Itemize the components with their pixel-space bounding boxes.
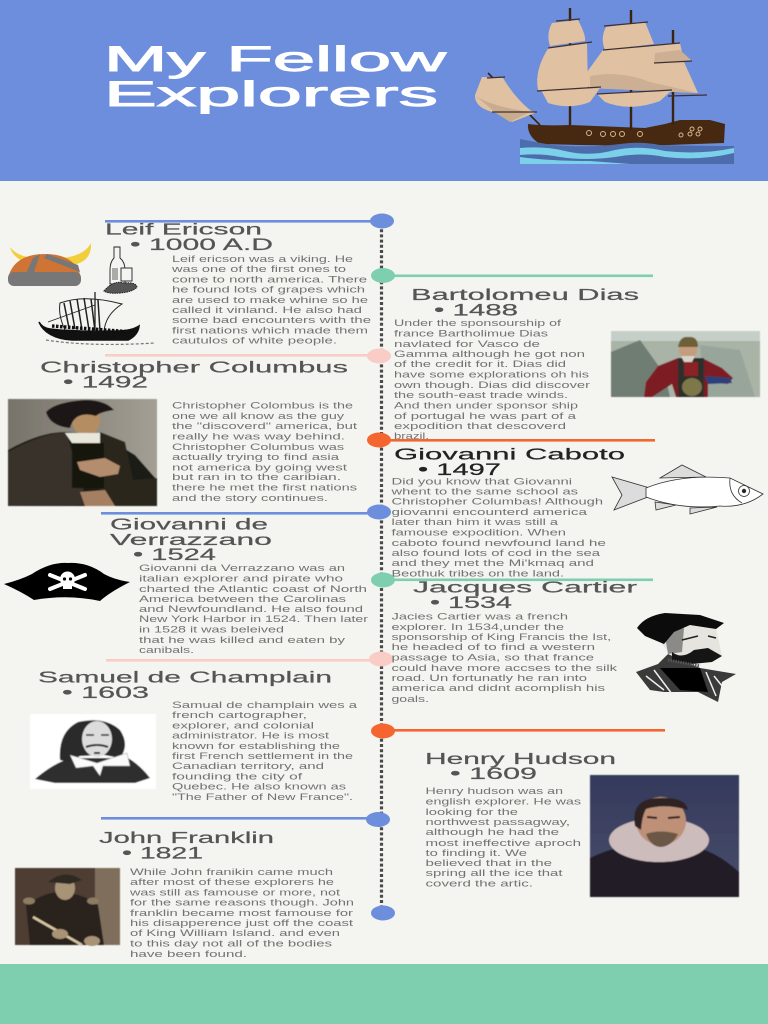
portrait: Jacques Cartier engraving [636,613,736,702]
panel: Leif Ericson [8,222,371,346]
heading: Leif Ericson: Leif Ericson [105,222,262,238]
text: Hudson bio: northwest passagway, [426,817,570,827]
text: Dias bio: france Bartholimue Dias [394,328,549,338]
date: 1603: • 1603 [62,684,149,702]
heading: Giovanni Caboto: Giovanni Caboto [394,446,625,464]
portrait: Bartolomeu Dias [611,331,760,397]
text: Dias bio: have some explorations oh his [394,370,590,380]
text: Champlain bio: administrator. He is most [172,730,330,740]
text: Verrazzano bio: New York Harbor in 1524. Then later [139,614,368,624]
text: Cartier bio: sponsorship of King Francis the Ist, [392,632,611,642]
text: Dias bio: expodition that descoverd [394,421,566,431]
icon: viking longship [39,292,155,344]
text: Champlain bio: founding the city of [172,772,303,782]
date: 1000 A.D: • 1000 A.D [130,236,273,254]
heading: Christopher Columbus: Christopher Columbus [40,359,348,376]
date: 1488: • 1488 [434,302,518,320]
text: Caboto bio: Did you know that Giovanni [392,476,572,486]
text: Dias bio: of the credit for it. Dias did [394,359,566,369]
heading: Giovanni de Verrazzano [110,516,272,549]
text: Champlain bio: first French settlement in the [172,751,353,761]
portrait: John Franklin [15,868,120,946]
header banner [0,0,768,181]
text: Columbus bio: actually trying to find asia [172,452,340,462]
text: Columbus bio: one we all know as the guy [172,411,345,421]
timeline marker: Jacques Cartier [371,572,653,588]
text: Hudson bio: looking for the [426,807,518,817]
text: Dias bio: the south-east trade winds. [394,390,568,400]
text: Caboto bio: and they met the Mi'kmaq and [392,558,594,568]
timeline marker: Samuel de Champlain [106,652,393,666]
text: Verrazzano bio: America between the Carolinas [139,594,347,604]
text: Columbus bio: really he was way behind. [172,432,345,442]
heading: Jacques Cartier: Jacques Cartier [413,580,637,597]
timeline marker: John Franklin [101,812,390,827]
title: Explorers [104,75,438,114]
heading: Giovanni de Verrazzano: Verrazzano [110,532,272,549]
icon: cod fish [612,465,763,514]
timeline marker: Bartolomeu Dias [371,268,653,283]
text: Leif Ericson bio: some bad encounters with the [172,315,371,325]
text: Cartier bio: goals. [392,694,429,704]
text: Champlain bio: Quebec. He also known as [172,782,347,792]
timeline spine [380,224,383,910]
text: Hudson bio: to finding it. We [426,848,527,858]
text: Caboto bio: also found lots of cod in the sea [392,548,601,558]
text: Verrazzano bio: in 1528 it was beleived [139,624,284,634]
text: Verrazzano bio: italian explorer and pirate who [139,574,343,584]
icon: viking helmet [8,243,91,286]
timeline end marker [371,906,395,920]
date: 1524: • 1524 [133,546,216,564]
text: Leif Ericson bio: cautulos of white people. [172,336,337,346]
text: Hudson bio [426,786,582,888]
text: Columbus bio: the "discoverd" america, but [172,421,358,431]
text: Verrazzano bio: and Newfoundland. He also found [139,604,363,614]
text: Verrazzano bio: charted the Atlantic coast of North [139,584,367,594]
timeline marker: Giovanni Caboto [367,432,655,448]
text: Leif Ericson bio [170,254,371,346]
text: Franklin bio: his disapperence just off the coast [130,918,354,928]
text: Cartier bio: road. Un fortunatly he ran into [392,673,587,683]
text: Caboto bio: famouse expodition. When [392,528,566,538]
text: Caboto bio: whent to the same school as [390,486,579,496]
text: Dias bio: own though. Dias did discover [394,380,590,390]
text: Franklin bio: While John franikin came much [130,867,333,877]
heading: Samuel de Champlain: Samuel de Champlain [38,670,332,687]
text: Columbus bio: not america by going west [172,462,348,472]
text: Cartier bio: he headed of to find a western [392,642,595,652]
text: Leif Ericson bio: called it vinland. He also had [172,305,362,315]
text: Leif Ericson bio: come to north america. There [172,274,367,284]
text: Leif Ericson bio: first nations which made them [172,326,369,336]
date: 1534: • 1534 [430,594,512,612]
text: Hudson bio: most ineffective aproch [426,838,581,848]
date: 1821: • 1821 [122,845,203,863]
text: Verrazzano bio: Giovanni da Verrazzano was an [139,563,345,573]
icon: sailing ship on waves [475,8,734,164]
text: Verrazzano bio: canibals. [139,645,194,655]
text: Franklin bio: of King William Island. and even [130,928,340,938]
text: Dias bio: navlated for Vasco de [394,339,540,349]
text: Columbus bio: Christopher Columbus was [172,442,345,452]
panel: Giovanni Caboto [390,446,763,578]
text: Dias bio: brazil. [394,431,429,441]
text: Hudson bio: coverd the artic. [426,878,533,888]
icon: pirate hat [4,563,130,601]
panel: Jacques Cartier [392,580,736,704]
text: Champlain bio: known for establishing the [172,741,340,751]
text: Dias bio: Gamma although he got non [394,349,585,359]
timeline marker: Giovanni de Verrazzano [101,504,391,520]
panel: Christopher Columbus [8,359,358,506]
text: Verrazzano bio: that he was killed and eaten by [139,635,346,645]
heading: Bartolomeu Dias: Bartolomeu Dias [411,287,639,304]
text: Cartier bio: america and didnt acomplish his [392,683,606,693]
text: Columbus bio [172,400,358,503]
text: Franklin bio [128,867,354,959]
text: Columbus bio: but ran in to the caribian. [172,472,341,482]
text: Cartier bio: explorer. In 1534,under the [392,622,564,632]
text: Champlain bio: Samual de champlain wes a [172,700,358,710]
panel: Samuel de Champlain [30,670,358,802]
text: Leif Ericson bio: he found lots of grapes which [172,285,365,295]
panel: Henry Hudson [425,751,739,897]
text: Caboto bio [390,476,606,578]
text: Cartier bio: could have more accses to the silk [392,663,618,673]
date: 1609: • 1609 [450,765,537,783]
text: Champlain bio: "The Father of New France". [172,792,353,802]
text: Caboto bio: giovanni encounterd america [392,507,588,517]
text: Cartier bio: passage to Asia, so that france [392,652,594,662]
panel: Bartolomeu Dias [394,287,760,441]
text: Franklin bio: after most of these explorers he [130,877,334,887]
text: Verrazzano bio [139,563,368,655]
title: My Fellow [104,40,448,79]
text: Champlain bio: explorer, and colonial [172,720,314,730]
text: Caboto bio: later than him it was still a [392,517,559,527]
text: Columbus bio: and the story continues. [172,493,328,503]
text: Leif Ericson bio: Leif ericson was a viking. He [172,254,353,264]
text: Dias bio: Under the sponsourship of [394,318,562,328]
icon: wine bottle and grapes [104,247,137,293]
heading: John Franklin: John Franklin [99,830,274,847]
timeline marker: Henry Hudson [371,724,665,738]
text: Hudson bio: english explorer. He was [426,796,582,806]
text: Hudson bio: Henry hudson was an [426,786,563,796]
text: Cartier bio: Jacies Cartier was a french [392,612,568,622]
text: Hudson bio: although he had the [426,827,559,837]
text: Dias bio: And then under sponsor ship [394,400,578,410]
panel: Giovanni de Verrazzano [4,516,368,655]
date: 1492: • 1492 [63,374,148,392]
text: Champlain bio: Canadian territory, and [172,761,324,771]
text: Champlain bio: french cartographer, [172,710,307,720]
timeline marker: Christopher Columbus [105,348,391,364]
text: Champlain bio [172,700,358,802]
heading: Henry Hudson: Henry Hudson [425,751,616,768]
text: Dias bio: of portugal he was part of a [394,411,577,421]
text: Hudson bio: believed that in the [426,858,552,868]
timeline marker: Leif Ericson [105,214,394,228]
portrait: Samuel de Champlain [30,714,156,789]
text: Hudson bio: spring all the ice that [426,868,563,878]
text: Franklin bio: have been found. [130,949,247,959]
text: Franklin bio: for the same reasons though. John [130,898,354,908]
portrait: Henry Hudson [590,775,739,897]
text: Leif Ericson bio: was one of the first ones to [170,264,346,274]
date: 1497: • 1497 [418,461,501,479]
text: Dias bio [394,318,590,441]
text: Caboto bio: caboto found newfound land he [392,538,606,548]
text: Franklin bio: to this day not all of the bodies [130,938,333,948]
panel: John Franklin [15,830,354,959]
text: Caboto bio: Christopher Columbas! Although [392,496,603,506]
text: Franklin bio: was still as famouse or more, not [128,888,341,898]
portrait: Christopher Columbus [8,399,157,506]
text: Columbus bio: there he met the first nations [172,482,358,492]
footer band [0,964,768,1024]
text: Franklin bio: franklin became most famouse for [130,908,353,918]
heading: Giovanni de Verrazzano: Giovanni de [110,516,268,534]
text: Leif Ericson bio: are used to make whine so he [172,295,368,305]
text: Columbus bio: Christopher Colombus is the [172,400,353,410]
title [104,40,448,114]
text: Caboto bio: Beothuk tribes on the land. [392,568,564,578]
text: Cartier bio [392,612,618,704]
